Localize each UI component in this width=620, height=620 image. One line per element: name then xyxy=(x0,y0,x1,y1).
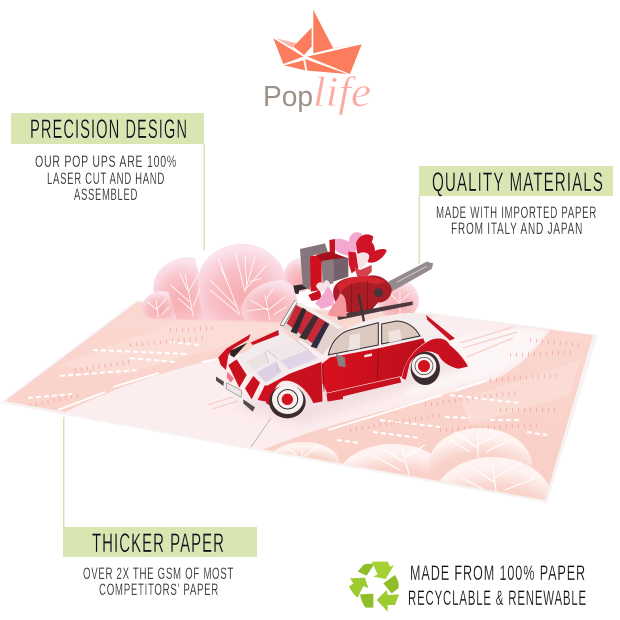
bottom tree branches xyxy=(288,432,535,498)
luggage, hearts and guitar on roof xyxy=(293,232,433,322)
panel: precision design xyxy=(11,113,205,250)
heading bar xyxy=(63,527,257,557)
description: ASSEMBLED xyxy=(74,186,138,204)
tree: far right xyxy=(378,280,419,320)
logo wordmark xyxy=(263,70,371,116)
icon: recycle symbol xyxy=(349,562,399,612)
description xyxy=(436,204,597,238)
rear wheel xyxy=(411,352,440,385)
description xyxy=(83,565,234,599)
guitar body xyxy=(333,275,392,313)
tree branches xyxy=(147,252,410,320)
car roof xyxy=(326,313,447,357)
white hood edge xyxy=(290,359,323,375)
description xyxy=(35,153,177,204)
lighter field bands xyxy=(94,364,576,425)
heart: pale xyxy=(357,252,369,269)
back trees xyxy=(142,244,419,322)
windshield with stripes xyxy=(280,300,343,355)
suitcase: red xyxy=(310,239,348,292)
panel: thicker paper xyxy=(63,417,257,599)
logo wordmark: Pop xyxy=(263,81,313,113)
car front xyxy=(216,328,323,418)
heart: rose xyxy=(354,265,372,278)
description: OUR POP UPS ARE 100% xyxy=(35,153,177,171)
heading bar xyxy=(419,166,613,196)
guitar neck xyxy=(388,262,433,292)
description: OVER 2X THE GSM OF MOST xyxy=(83,565,234,583)
hearts: lower xyxy=(308,280,347,317)
car shadow xyxy=(230,355,470,425)
suitcase: grey back xyxy=(300,243,328,290)
rack left bracket xyxy=(293,284,308,294)
logo wordmark: life xyxy=(313,70,371,116)
heading bar xyxy=(11,113,204,144)
field red tick marks xyxy=(30,328,580,430)
road right highlight xyxy=(408,332,540,393)
front fender xyxy=(265,362,323,407)
body side xyxy=(322,338,425,393)
tree: large centre xyxy=(198,244,286,321)
tree: left xyxy=(153,257,210,320)
connector line xyxy=(418,196,420,264)
description: COMPETITORS' PAPER xyxy=(99,581,219,599)
center fold line xyxy=(251,418,271,447)
lane stripes xyxy=(58,359,487,430)
side windows xyxy=(328,321,420,355)
heading: THICKER PAPER xyxy=(92,528,225,558)
logo: Poplife xyxy=(263,10,371,116)
description: LASER CUT AND HAND xyxy=(47,170,165,188)
card white paper edge xyxy=(0,300,598,503)
rear wing panel xyxy=(426,315,455,341)
tree: front xyxy=(241,280,297,322)
hood compartments xyxy=(237,328,322,387)
tree: far left xyxy=(142,291,177,319)
panel: quality materials xyxy=(418,166,613,264)
front bumper and plate xyxy=(216,377,255,412)
icon: origami paper boat xyxy=(273,10,362,74)
pop-up red car xyxy=(280,300,468,402)
rear fender xyxy=(402,338,468,380)
rack strap xyxy=(359,294,364,322)
heart: pink left xyxy=(330,232,362,256)
card printed field xyxy=(5,302,593,500)
card artwork xyxy=(28,316,579,500)
door lines xyxy=(323,348,378,392)
roof rack bar xyxy=(337,301,413,320)
running board xyxy=(326,377,402,402)
heading: PRECISION DESIGN xyxy=(30,114,188,144)
recycled paper statement xyxy=(408,562,587,610)
front wheel xyxy=(269,385,306,418)
tree: behind car xyxy=(284,258,316,292)
door handle and mirror xyxy=(364,353,372,357)
connector line xyxy=(63,417,64,527)
connector line xyxy=(204,144,205,250)
pop-up card base xyxy=(0,300,598,503)
grille and nose slats xyxy=(218,334,273,404)
road pink stripes xyxy=(207,327,517,409)
white road xyxy=(40,315,550,450)
bottom trees on card xyxy=(274,428,549,500)
field white flower marks xyxy=(28,342,547,443)
hearts: red xyxy=(348,234,387,273)
